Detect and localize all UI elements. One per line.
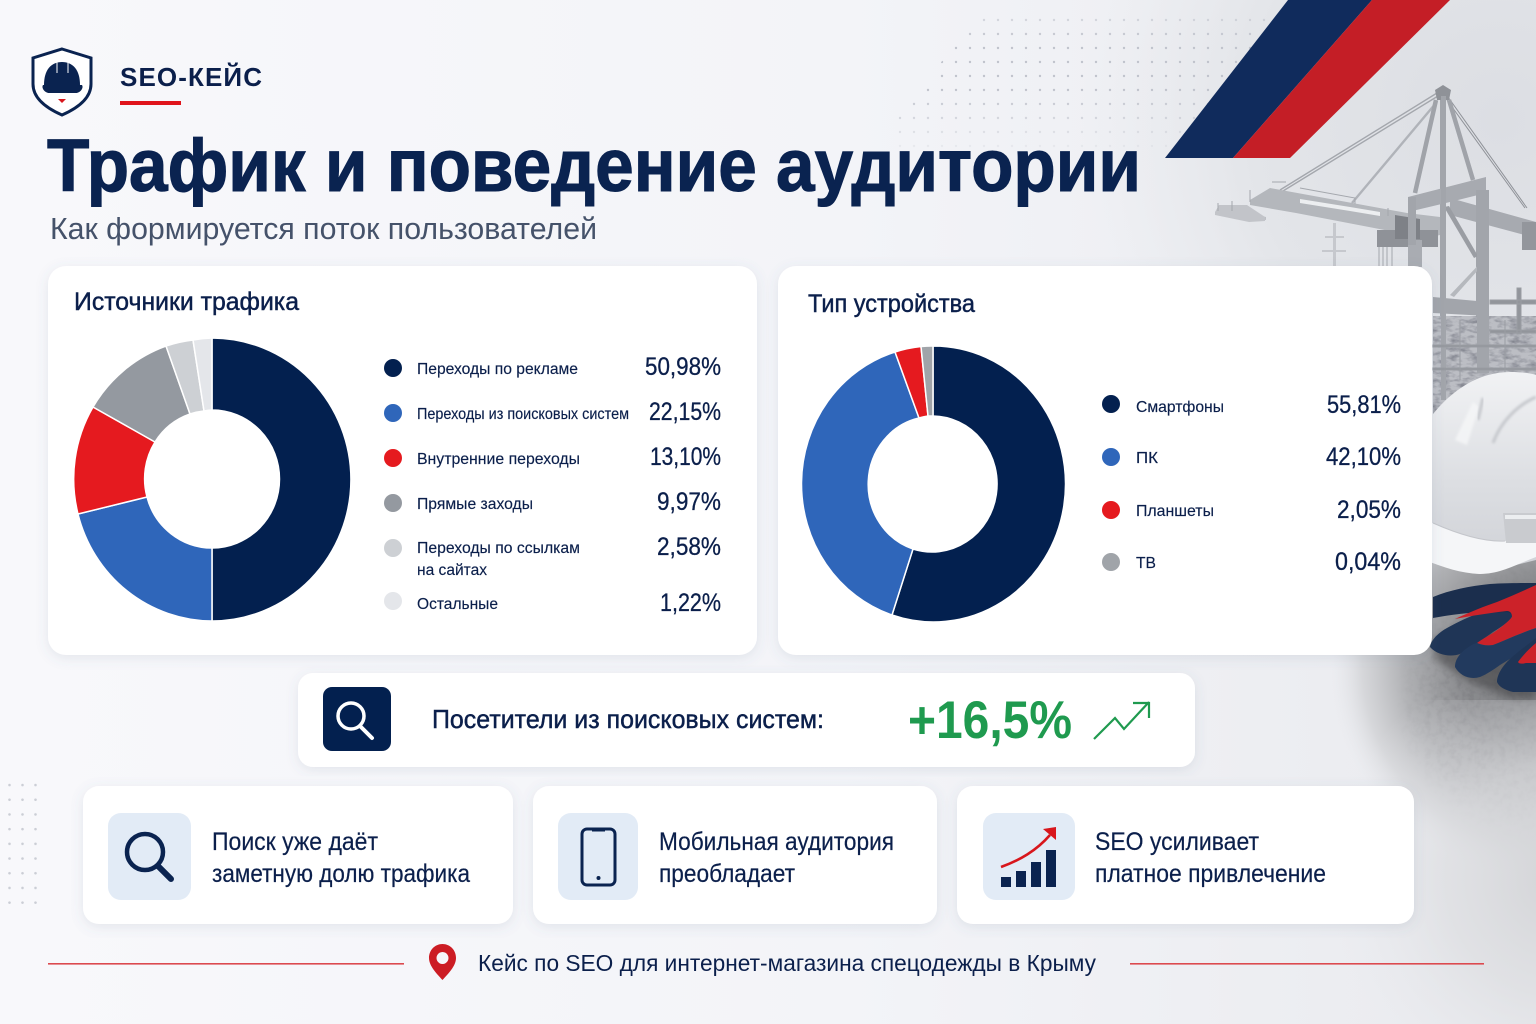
- legend: traffic sources: на сайтах: [417, 562, 487, 579]
- panel: mobile insight: [533, 786, 937, 924]
- callout value: +16,5%: [908, 691, 1072, 750]
- panel: device type: [778, 266, 1432, 655]
- legend: traffic sources: Прямые заходы: [417, 496, 533, 513]
- legend: traffic sources: [384, 353, 721, 617]
- insight text: преобладает: [659, 860, 795, 888]
- legend: traffic sources: 1,22%: [660, 589, 721, 617]
- legend: traffic sources: 13,10%: [650, 443, 721, 471]
- legend: device type: [1102, 391, 1401, 576]
- legend: device type: Планшеты: [1136, 503, 1214, 520]
- dot pattern left: [2, 778, 42, 910]
- image: concrete floor: [1348, 560, 1536, 1004]
- panel: seo insight: [957, 786, 1414, 924]
- legend: traffic sources: 9,97%: [657, 488, 721, 516]
- callout label: Посетители из поисковых систем:: [432, 704, 824, 734]
- dot pattern top: [899, 18, 1265, 147]
- legend: device type: 55,81%: [1327, 391, 1401, 419]
- background haze: [1050, 0, 1536, 560]
- image: work gloves: [1430, 583, 1536, 698]
- icon: search on navy tile: [323, 687, 391, 751]
- panel: search insight: [83, 786, 513, 924]
- donut chart: traffic sources: [74, 338, 351, 621]
- image: port crane: [1215, 85, 1536, 426]
- insight text: платное привлечение: [1095, 860, 1326, 888]
- icon: growth arrow: [1094, 702, 1149, 739]
- icon: magnifier: [108, 813, 191, 900]
- footer text: Кейс по SEO для интернет-магазина спецодежды в Крыму: [478, 950, 1096, 976]
- insight text: SEO усиливает: [1095, 828, 1260, 856]
- image: safety helmet: [1425, 372, 1536, 574]
- legend: device type: ПК: [1136, 450, 1159, 467]
- legend: device type: ТВ: [1136, 555, 1156, 572]
- icon: shield with helmet: [33, 49, 91, 115]
- legend: traffic sources: Переходы по рекламе: [417, 361, 578, 378]
- footer: [48, 944, 1484, 980]
- panel: traffic sources: [48, 266, 757, 655]
- brand underline: [120, 101, 181, 105]
- icon: smartphone: [558, 813, 638, 900]
- legend: traffic sources: 50,98%: [645, 353, 721, 381]
- legend: device type: Смартфоны: [1136, 399, 1224, 416]
- brand name: SEO-КЕЙС: [120, 62, 262, 92]
- legend: traffic sources: Переходы по ссылкам: [417, 540, 580, 557]
- insight text: заметную долю трафика: [212, 860, 470, 888]
- legend: traffic sources: Внутренние переходы: [417, 451, 580, 468]
- donut chart: device type: [802, 346, 1066, 622]
- icon: rising bars: [983, 813, 1075, 900]
- colored diagonal stripes: [1165, 0, 1450, 158]
- legend: traffic sources: Переходы из поисковых систем: [417, 406, 629, 423]
- legend: traffic sources: 2,58%: [657, 533, 721, 561]
- callout: search visitors growth: [298, 673, 1195, 767]
- legend: device type: 0,04%: [1335, 548, 1401, 576]
- heading: device type: Тип устройства: [808, 290, 975, 318]
- legend: traffic sources: Остальные: [417, 596, 498, 613]
- icon: location pin: [429, 944, 456, 980]
- insight text: Поиск уже даёт: [212, 828, 379, 856]
- legend: device type: 42,10%: [1326, 443, 1401, 471]
- title: Трафик и поведение аудитории: [47, 124, 1141, 207]
- subtitle: Как формируется поток пользователей: [50, 211, 597, 246]
- insight text: Мобильная аудитория: [659, 828, 894, 856]
- legend: traffic sources: 22,15%: [649, 398, 721, 426]
- heading: traffic sources: Источники трафика: [74, 288, 299, 316]
- legend: device type: 2,05%: [1337, 496, 1401, 524]
- logo: [33, 49, 262, 115]
